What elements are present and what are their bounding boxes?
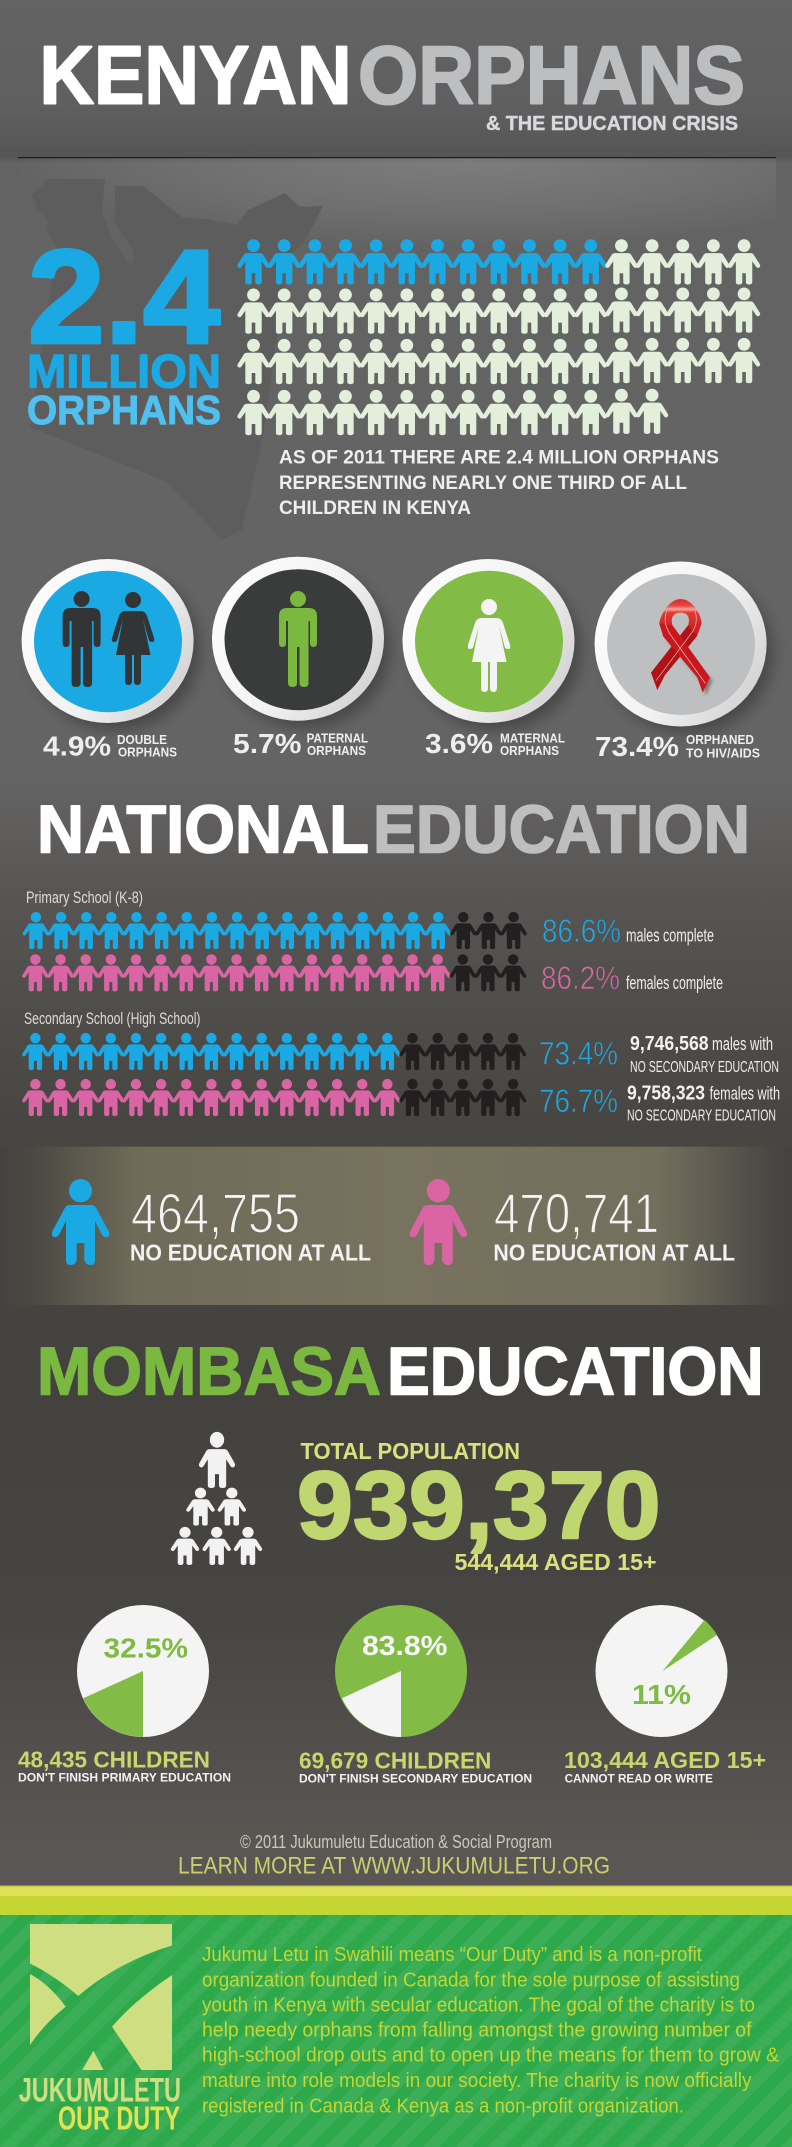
headline statistic: 2.4 million orphans: MILLION — [27, 345, 221, 398]
stat: orphaned to HIV/AIDS — [595, 731, 760, 762]
stat: primary males: 86.6% — [542, 913, 621, 949]
stat: orphaned to HIV/AIDS: TO HIV/AIDS — [686, 746, 760, 761]
label: primary school: Primary School (K-8) — [26, 888, 143, 907]
stat: cannot read or write: 103,444 AGED 15+ — [564, 1747, 766, 1773]
copyright line: © 2011 Jukumuletu Education & Social Program — [240, 1832, 552, 1852]
icon: red ribbon — [651, 599, 713, 695]
stat: males with no education — [130, 1181, 371, 1266]
stat: orphaned to HIV/AIDS: ORPHANED — [686, 732, 754, 747]
label: secondary school: Secondary School (High School) — [24, 1009, 200, 1028]
title: ORPHANS — [358, 28, 745, 121]
heading: Mombasa education — [37, 1333, 764, 1409]
stat: cannot read or write: CANNOT READ OR WRITE — [565, 1772, 713, 1786]
stat: cannot read or write — [564, 1747, 766, 1786]
stat: primary females: females complete — [626, 973, 723, 993]
stat: primary males: males complete — [626, 926, 714, 946]
stat: males with no education: NO EDUCATION AT ALL — [130, 1240, 371, 1266]
logo wordmark: JUKUMULETU — [19, 2072, 181, 2110]
title — [40, 28, 745, 121]
heading: Mombasa education: MOMBASA — [37, 1333, 381, 1409]
pie chart: 11% illiteracy: 11% — [632, 1679, 691, 1710]
about the charity text: organization founded in Canada for the sole purpose of assisting — [202, 1969, 740, 1991]
stat: double orphans: 4.9% — [43, 731, 111, 762]
stat: maternal orphans: MATERNAL — [500, 731, 565, 746]
logo wordmark — [19, 2072, 181, 2136]
badge: HIV/AIDS ribbon — [595, 562, 773, 733]
stat: males with no education: 464,755 — [131, 1181, 300, 1244]
about the charity text: high-school drop outs and to open up the means for them to grow & — [202, 2045, 780, 2067]
stat: orphaned to HIV/AIDS: 73.4% — [595, 731, 679, 762]
stat: paternal orphans — [233, 728, 368, 759]
about the charity text: registered in Canada & Kenya as a non-profit organization. — [202, 2095, 684, 2117]
stat: maternal orphans — [425, 728, 565, 759]
badge: paternal orphans — [212, 557, 390, 728]
about the charity text: help needy orphans from falling amongst the growing number of — [202, 2020, 752, 2042]
stat: secondary males: 73.4% — [539, 1035, 618, 1071]
logo wordmark: OUR DUTY — [58, 2099, 180, 2136]
stat: primary females: 86.2% — [541, 960, 620, 996]
stat: secondary females: 9,758,323 — [627, 1082, 705, 1104]
stat: primary dropouts — [18, 1746, 231, 1784]
stat: maternal orphans: 3.6% — [425, 728, 493, 759]
about the charity text — [202, 1944, 780, 2117]
stat: total population: 939,370 — [297, 1452, 661, 1559]
stat: primary males — [542, 913, 714, 949]
stat: females with no education — [493, 1181, 735, 1266]
stat: secondary dropouts: DON'T FINISH SECONDARY EDUCATION — [299, 1772, 532, 1786]
orphans description: REPRESENTING NEARLY ONE THIRD OF ALL — [279, 472, 687, 494]
icon: population pyramid of people — [171, 1432, 262, 1565]
headline statistic: 2.4 million orphans: ORPHANS — [27, 387, 221, 433]
heading: national education: NATIONAL — [37, 792, 369, 868]
stat: females with no education: NO EDUCATION AT ALL — [493, 1240, 735, 1266]
stat: primary females — [541, 960, 723, 996]
stat: total population: TOTAL POPULATION — [300, 1438, 520, 1464]
stat: secondary males — [539, 1033, 779, 1076]
subtitle: & THE EDUCATION CRISIS — [486, 113, 738, 135]
headline statistic: 2.4 million orphans: 2.4 — [28, 224, 220, 372]
logo: Jukumuletu mark — [30, 1924, 172, 2070]
stat: total population: 544,444 AGED 15+ — [454, 1549, 656, 1575]
about the charity text: Jukumu Letu in Swahili means “Our Duty” and is a non-profit — [202, 1944, 702, 1966]
pie chart: 11% illiteracy — [596, 1605, 728, 1737]
headline statistic: 2.4 million orphans — [27, 224, 221, 433]
pictogram: secondary school females — [22, 1079, 526, 1116]
pie chart: 83.8% secondary — [335, 1605, 467, 1737]
heading: Mombasa education: EDUCATION — [387, 1333, 764, 1409]
panel: no education at all — [0, 1147, 792, 1305]
stat: secondary dropouts — [299, 1747, 532, 1786]
pie chart: 83.8% secondary: 83.8% — [362, 1630, 448, 1661]
title: KENYAN — [40, 28, 352, 121]
stat: secondary dropouts: 69,679 CHILDREN — [299, 1747, 491, 1773]
stat: paternal orphans: 5.7% — [233, 728, 302, 759]
pictogram: primary school males — [23, 912, 527, 949]
pie chart: 32.5% primary: 32.5% — [104, 1633, 188, 1664]
stat: secondary females — [539, 1082, 780, 1124]
stat: secondary males: 9,746,568 — [630, 1033, 709, 1055]
footer panel — [0, 1886, 792, 2147]
pictogram: primary school females — [22, 954, 526, 991]
learn more link: LEARN MORE AT WWW.JUKUMULETU.ORG — [178, 1852, 610, 1879]
stat: females with no education: 470,741 — [494, 1181, 659, 1244]
orphans description: CHILDREN IN KENYA — [279, 497, 471, 519]
stat: primary dropouts: DON'T FINISH PRIMARY EDUCATION — [18, 1770, 231, 1784]
stat: primary dropouts: 48,435 CHILDREN — [18, 1746, 210, 1772]
stat: maternal orphans: ORPHANS — [500, 743, 559, 758]
stat: paternal orphans: ORPHANS — [307, 743, 366, 758]
stat: double orphans: DOUBLE — [117, 732, 167, 747]
badge: maternal orphans — [402, 559, 581, 730]
map of Kenya silhouette — [30, 179, 323, 540]
heading: national education — [37, 792, 750, 868]
icon: blue child — [52, 1179, 109, 1265]
pictogram: secondary school males — [22, 1033, 526, 1070]
icon: pink child — [410, 1179, 467, 1265]
pictogram: orphans as rows of people — [237, 239, 760, 435]
stat: double orphans: ORPHANS — [118, 745, 177, 760]
badge: double orphans — [22, 559, 200, 730]
about the charity text: mature into role models in our society. The charity is now officially — [202, 2070, 752, 2092]
pie chart: 32.5% primary — [77, 1605, 209, 1737]
stat: secondary females: 76.7% — [539, 1083, 618, 1119]
stat: double orphans — [43, 731, 177, 762]
stat: paternal orphans: PATERNAL — [307, 731, 368, 746]
heading: national education: EDUCATION — [373, 792, 750, 868]
about the charity text: youth in Kenya with secular education. The goal of the charity is to — [202, 1995, 755, 2017]
orphans description: AS OF 2011 THERE ARE 2.4 MILLION ORPHANS — [279, 446, 719, 468]
orphans description — [279, 446, 719, 519]
